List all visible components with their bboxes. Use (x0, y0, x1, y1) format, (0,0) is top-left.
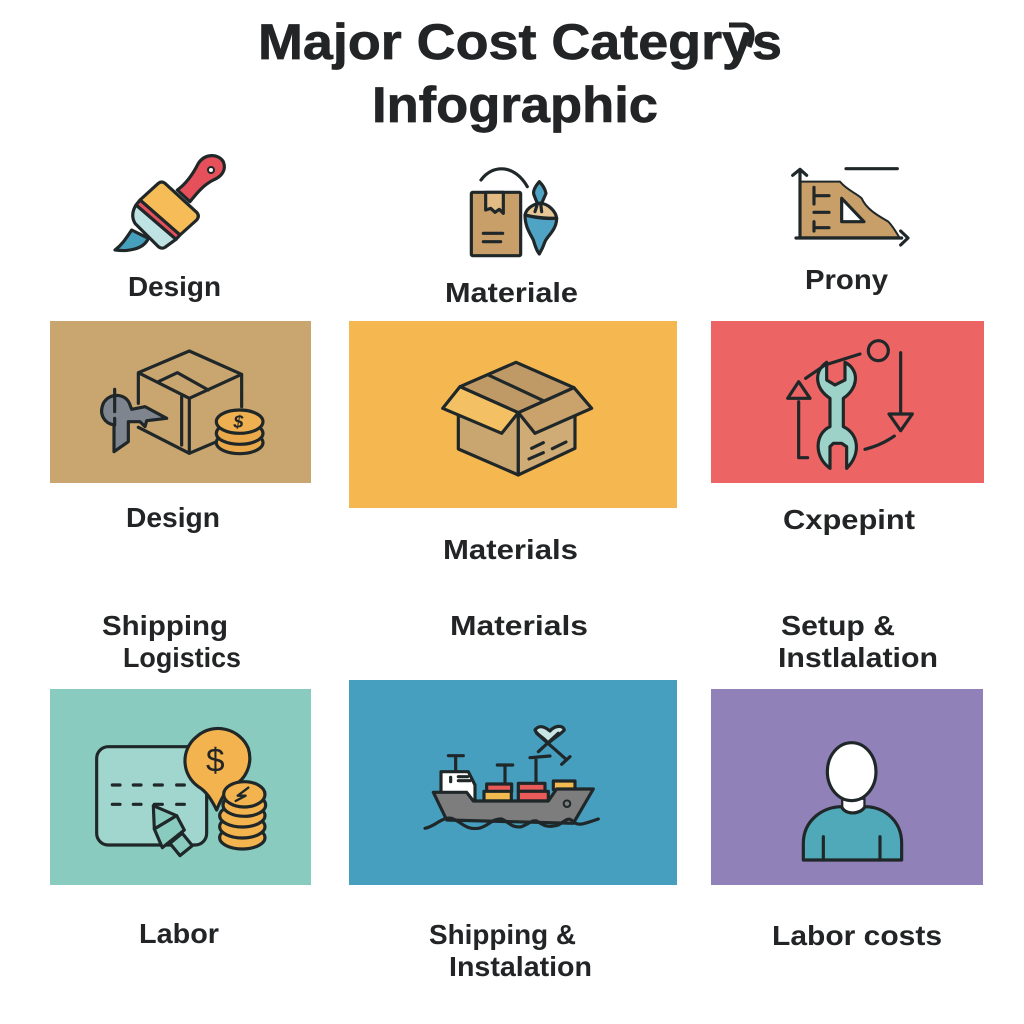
top line (846, 164, 897, 173)
package (471, 192, 521, 256)
brush handle (177, 156, 224, 202)
bristle base (133, 205, 176, 248)
sleeves (823, 837, 880, 860)
icon: chart ruler (793, 169, 908, 245)
package tape (486, 192, 503, 213)
wrench (818, 362, 856, 468)
brush strokes (535, 203, 542, 212)
cursor (153, 806, 192, 856)
title (258, 14, 782, 133)
icon: wrench cycle (788, 341, 912, 468)
label: design top: Design (128, 271, 221, 302)
label: shipping logistics: Logistics (123, 642, 241, 673)
box left side (458, 410, 518, 475)
arc (481, 169, 527, 187)
form card (97, 747, 207, 845)
hull (433, 789, 593, 823)
panel: red setup (711, 321, 984, 483)
coins (216, 410, 263, 454)
far flaps (460, 362, 574, 413)
panel: teal labor (50, 689, 311, 885)
form dashes (112, 785, 184, 804)
circle (868, 341, 888, 361)
neck (843, 797, 864, 807)
ferrule band (136, 200, 180, 239)
crane arms (537, 733, 570, 764)
label: setup and installation (778, 610, 938, 673)
label: cxpepint: Cxpepint (783, 504, 915, 535)
cabin (441, 772, 475, 801)
ruler slope (800, 182, 899, 237)
label: shipping logistics: Shipping (102, 610, 228, 641)
dollar sign: $ (206, 743, 225, 780)
title: Infographic (372, 77, 658, 133)
porthole (564, 800, 570, 807)
triangle cut-out (842, 198, 864, 222)
left flap (443, 387, 518, 433)
icon: open box (443, 362, 592, 475)
ruler ticks (814, 187, 829, 231)
top arc (806, 354, 860, 378)
down arrow (889, 353, 912, 431)
brush body (525, 215, 557, 254)
icon: paint brush (115, 156, 224, 251)
handle hole (208, 167, 214, 173)
label: design lower: Design (126, 502, 220, 533)
box outline (138, 351, 242, 453)
label: materials lower: Materials (443, 534, 578, 565)
waves (425, 818, 598, 829)
brush cap (525, 203, 557, 218)
panel: blue shipping (349, 680, 677, 885)
box right side (518, 410, 575, 475)
label: setup and installation: Instlalation (778, 642, 938, 673)
icon: person (803, 743, 902, 860)
panel: purple labor costs (711, 689, 983, 885)
title: Major Cost Categrys (258, 14, 782, 70)
brush tip (534, 182, 546, 203)
up arrow (788, 382, 810, 458)
bristle tip (115, 230, 148, 251)
label: shipping and installation: Instalation (449, 951, 592, 982)
flap seam (488, 375, 543, 401)
label: shipping logistics (102, 610, 241, 673)
label: setup and installation: Setup & (781, 610, 895, 641)
right flap (518, 388, 592, 433)
package lines (483, 233, 503, 242)
cabin windows (451, 777, 470, 782)
label: prony: Prony (805, 264, 888, 295)
head (827, 743, 876, 801)
box label lines (529, 442, 566, 459)
label: materials middle: Materials (450, 610, 588, 641)
collar (843, 800, 863, 812)
grey marker (102, 395, 167, 452)
heart (535, 726, 564, 743)
icon: materials box and brush (471, 169, 557, 256)
coin stack (220, 782, 266, 849)
label: shipping and installation (429, 919, 592, 982)
panel: yellow materials (349, 321, 677, 508)
panel: tan design (50, 321, 311, 483)
label: shipping and installation: Shipping & (429, 919, 576, 950)
axes (793, 169, 908, 245)
containers (484, 781, 575, 801)
icon: form with dollar (97, 728, 266, 856)
dollar mark: $ (232, 412, 244, 432)
label: materiale: Materiale (445, 277, 578, 308)
label: labor: Labor (139, 918, 219, 949)
masts (448, 756, 550, 783)
brush ferrule (140, 182, 198, 235)
marker line (110, 389, 119, 425)
bottom arc (865, 436, 894, 449)
torso (803, 807, 902, 860)
icon: cargo ship (425, 726, 598, 829)
label: labor costs: Labor costs (772, 920, 942, 951)
icon: box with coins (102, 351, 263, 454)
dollar bubble (185, 728, 250, 810)
